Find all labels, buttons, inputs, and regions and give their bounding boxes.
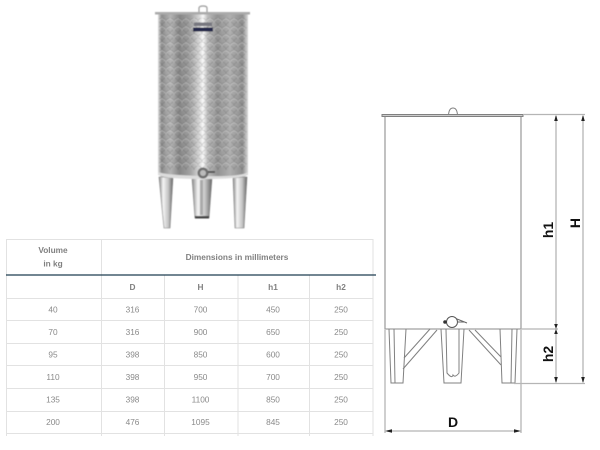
row: 200 kg: 200 bbox=[46, 417, 60, 427]
drawing: right brace bbox=[469, 330, 501, 365]
header: volume: Volume bbox=[38, 245, 68, 255]
row: 95 kg bbox=[48, 350, 348, 360]
row: 40 kg: 250 bbox=[334, 304, 348, 314]
row: 70 kg: 316 bbox=[126, 327, 140, 337]
row: 135 kg: 250 bbox=[334, 394, 348, 404]
row: 40 kg: 450 bbox=[266, 304, 280, 314]
row: 95 kg: 398 bbox=[126, 350, 140, 360]
tank body bbox=[158, 14, 248, 179]
tank rim bbox=[155, 12, 250, 14]
dimension H line bbox=[582, 116, 584, 382]
row: 40 kg: 40 bbox=[48, 304, 58, 314]
tank left leg bbox=[159, 177, 173, 228]
drawing: left brace bbox=[403, 329, 437, 369]
label h1: h1 bbox=[540, 222, 556, 238]
drawing: centre leg bbox=[441, 329, 464, 383]
drawing: tank body bbox=[385, 117, 521, 329]
label h2: h2 bbox=[540, 346, 556, 362]
tank right leg bbox=[233, 177, 247, 228]
row: 135 kg bbox=[46, 394, 348, 404]
row: 135 kg: 398 bbox=[126, 394, 140, 404]
dimensions table bbox=[6, 239, 376, 436]
row: 70 kg: 650 bbox=[266, 327, 280, 337]
row: 110 kg: 398 bbox=[126, 372, 140, 382]
row: 70 kg: 900 bbox=[194, 327, 208, 337]
dimension h2 line bbox=[555, 331, 557, 382]
tank label bbox=[193, 22, 213, 32]
row: 200 kg: 845 bbox=[266, 417, 280, 427]
row: 110 kg: 250 bbox=[334, 372, 348, 382]
row: 95 kg: 95 bbox=[48, 350, 58, 360]
row: 110 kg: 110 bbox=[46, 372, 60, 382]
row: 200 kg: 250 bbox=[334, 417, 348, 427]
row: 135 kg: 850 bbox=[266, 394, 280, 404]
technical drawing bbox=[382, 108, 523, 383]
tank lid handle bbox=[199, 6, 207, 12]
row: 110 kg: 950 bbox=[194, 372, 208, 382]
header: volume: in kg bbox=[43, 258, 63, 268]
row: 70 kg: 70 bbox=[48, 327, 58, 337]
dimension lines bbox=[385, 114, 585, 433]
row: 110 kg bbox=[46, 372, 348, 382]
row: 135 kg: 1100 bbox=[192, 394, 210, 404]
label H: H bbox=[567, 218, 583, 228]
row: 200 kg bbox=[46, 417, 348, 427]
row: 40 kg: 316 bbox=[126, 304, 140, 314]
row: 200 kg: 476 bbox=[126, 417, 140, 427]
row: 110 kg: 700 bbox=[266, 372, 280, 382]
row: 200 kg: 1095 bbox=[191, 417, 210, 427]
column headers: H bbox=[198, 282, 204, 292]
photo: stainless steel tank bbox=[155, 6, 250, 228]
dimension extension lines bbox=[385, 114, 585, 433]
header: dimensions: Dimensions in millimeters bbox=[186, 252, 289, 262]
row: 95 kg: 850 bbox=[194, 350, 208, 360]
label D: D bbox=[448, 414, 458, 430]
column headers bbox=[130, 282, 346, 292]
drawing: tap bbox=[443, 316, 467, 328]
row: 95 kg: 600 bbox=[266, 350, 280, 360]
drawing: right leg bbox=[500, 329, 517, 383]
column headers: h1 bbox=[268, 282, 278, 292]
table header rule bbox=[6, 274, 376, 276]
row: 70 kg bbox=[48, 327, 348, 337]
tank centre leg bbox=[192, 178, 212, 218]
row: 70 kg: 250 bbox=[334, 327, 348, 337]
row: 135 kg: 135 bbox=[46, 394, 60, 404]
drawing: lid knob bbox=[448, 108, 458, 115]
column headers: h2 bbox=[336, 282, 346, 292]
column headers: D bbox=[130, 282, 136, 292]
dimension labels bbox=[448, 218, 583, 430]
drawing: lid bbox=[382, 114, 523, 116]
row: 40 kg bbox=[48, 304, 348, 314]
dimension D line bbox=[387, 430, 519, 432]
tank tap bbox=[198, 168, 215, 178]
dimension arrowheads bbox=[385, 115, 585, 433]
row: 40 kg: 700 bbox=[194, 304, 208, 314]
table grid bbox=[6, 239, 373, 436]
row: 95 kg: 250 bbox=[334, 350, 348, 360]
drawing: left leg bbox=[389, 329, 406, 383]
dimension h1 line bbox=[555, 116, 557, 327]
